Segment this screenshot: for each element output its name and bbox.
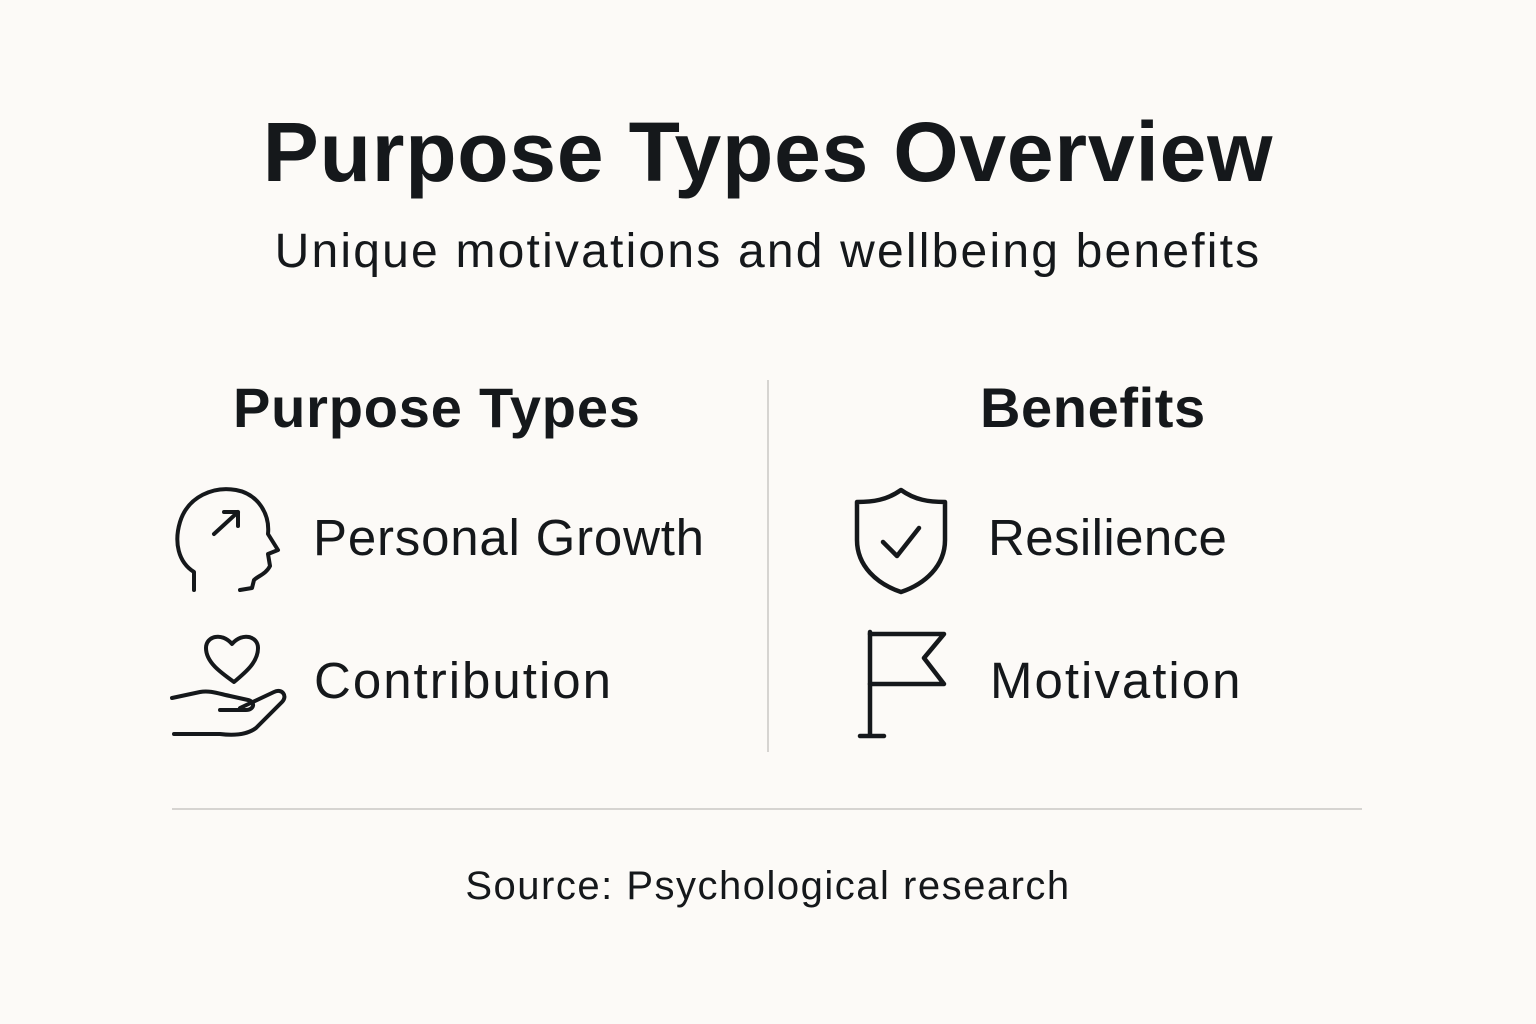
label: motivation: Motivation — [990, 652, 1242, 709]
source note: Source: Psychological research — [465, 864, 1071, 908]
label: personal growth: Personal Growth — [313, 509, 705, 566]
horizontal divider — [172, 808, 1362, 810]
subtitle: Unique motivations and wellbeing benefits — [275, 225, 1261, 278]
icon: head with arrow — [175, 487, 280, 592]
panel: purpose types — [170, 376, 705, 737]
label: contribution: Contribution — [314, 652, 613, 709]
title: Purpose Types Overview — [263, 105, 1273, 199]
icon: heart in hand — [170, 634, 286, 737]
label: resilience: Resilience — [988, 509, 1227, 566]
panel: benefits — [854, 376, 1242, 738]
heading: benefits: Benefits — [980, 376, 1206, 439]
heading: purpose types: Purpose Types — [233, 376, 641, 439]
icon: shield with check — [854, 488, 948, 594]
vertical divider — [767, 380, 769, 752]
icon: flag — [858, 630, 946, 738]
